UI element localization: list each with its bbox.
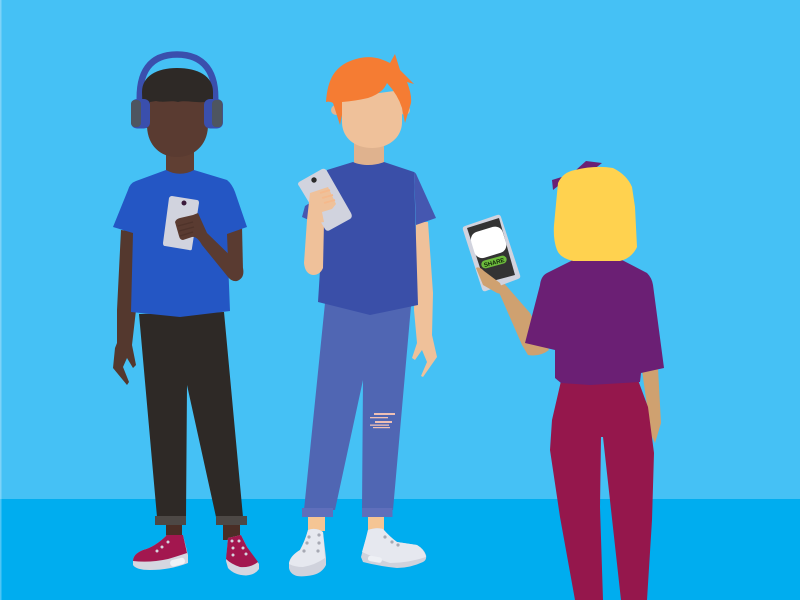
right trouser cuff: [216, 516, 247, 525]
right ankle: [223, 525, 240, 540]
left jeans cuff: [302, 508, 333, 517]
person: girl with blonde hair: [463, 161, 664, 600]
upper right arm: [226, 226, 243, 275]
hand on phone: [307, 187, 336, 224]
right sneaker: [226, 535, 259, 576]
ears: [331, 105, 410, 115]
right ankle: [368, 517, 384, 532]
face: [147, 101, 208, 157]
left arm: [304, 220, 324, 275]
left sneaker: [133, 535, 188, 570]
floor: [0, 499, 800, 600]
neck: [166, 150, 194, 175]
share button: SHARE: [483, 258, 505, 269]
top: [525, 260, 664, 385]
trousers: [139, 312, 243, 517]
phone: [163, 196, 199, 250]
person: boy with headphones: [113, 54, 259, 576]
bow left: [552, 176, 565, 190]
left sleeve: [302, 190, 330, 224]
left ankle: [166, 525, 182, 539]
left ankle: [308, 517, 325, 531]
jeans: [304, 303, 411, 510]
t-shirt: [318, 162, 418, 315]
bow right: [576, 161, 602, 170]
right white sneaker: [361, 528, 426, 568]
phone: [298, 169, 352, 231]
hand: [476, 267, 505, 295]
left arm: [113, 230, 136, 385]
hair: [554, 167, 637, 261]
left trouser cuff: [155, 516, 186, 525]
left ear cup: [131, 99, 150, 128]
phone screen: [467, 218, 515, 283]
message bubble: [469, 225, 508, 260]
ripped jeans lines: [370, 413, 395, 428]
right jeans cuff: [362, 508, 392, 517]
right ear cup: [204, 99, 223, 128]
right arm: [412, 222, 437, 377]
arm: [477, 268, 549, 355]
face: [342, 90, 402, 148]
right arm: [642, 368, 661, 443]
hair: [326, 54, 414, 125]
left white sneaker: [289, 529, 326, 576]
headphone band: [140, 54, 215, 104]
person: boy with red hair: [289, 54, 437, 576]
right sleeve: [414, 172, 436, 225]
trousers: [550, 380, 654, 600]
t-shirt: [113, 170, 247, 317]
neck: [354, 142, 384, 166]
hair: [142, 68, 213, 128]
right forearm and hand: [175, 213, 243, 281]
phone: [463, 215, 520, 291]
